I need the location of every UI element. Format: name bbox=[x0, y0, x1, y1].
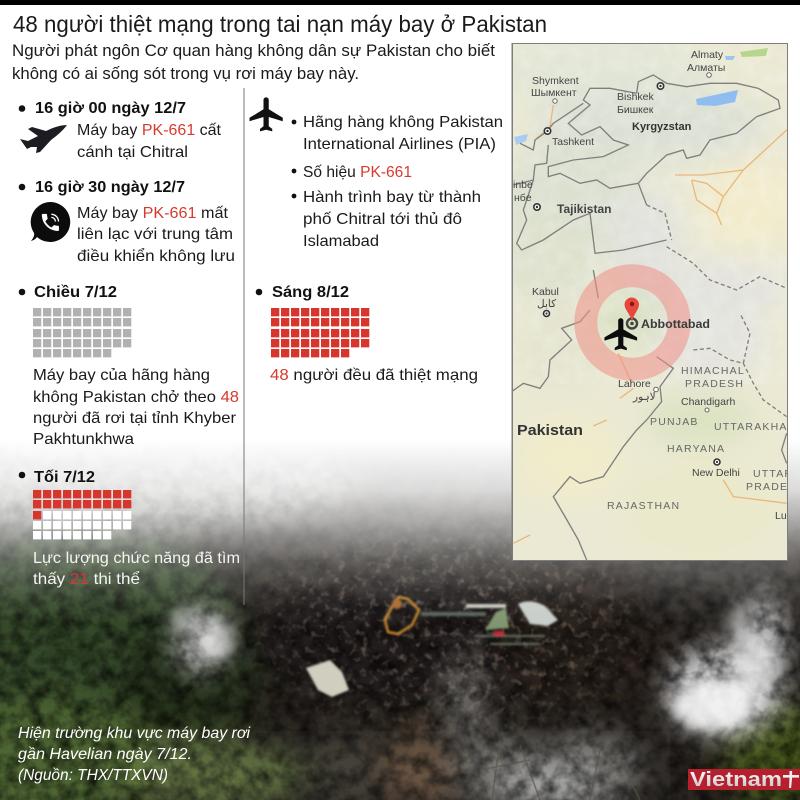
map labels: Tashkent bbox=[552, 136, 594, 148]
map labels: inbe bbox=[513, 179, 533, 191]
map labels: Kabul bbox=[532, 286, 559, 298]
flight info: Hãng hàng không Pakistan bbox=[303, 114, 503, 131]
event: Sáng 8/12: Sáng 8/12 bbox=[272, 284, 349, 301]
flight info: International Airlines (PIA) bbox=[303, 136, 496, 153]
event: Chiều 7/12: Chiều 7/12 bbox=[34, 284, 117, 301]
map labels: Tajikistan bbox=[557, 202, 611, 216]
map labels: Шымкент bbox=[531, 87, 577, 99]
map labels: Shymkent bbox=[532, 75, 579, 87]
helicopter bbox=[385, 597, 558, 645]
map labels: Алматы bbox=[687, 62, 725, 74]
map labels: New Delhi bbox=[692, 467, 740, 479]
map labels: Pakistan bbox=[517, 423, 583, 439]
map labels: لاہور bbox=[632, 391, 656, 403]
map labels: PRADESH bbox=[685, 378, 744, 390]
unit chart: 48 grey squares bbox=[33, 308, 131, 357]
location pin and Abbottabad label: Abbottabad bbox=[641, 317, 710, 331]
map labels: Chandigarh bbox=[681, 396, 735, 408]
icon: plane on map bbox=[604, 318, 637, 350]
crash debris bbox=[306, 660, 349, 697]
background photo: crash site on forested hillside bbox=[0, 430, 800, 800]
map roads bbox=[535, 105, 787, 225]
flight info: phố Chitral tới thủ đô bbox=[303, 211, 462, 228]
event: Sáng 8/12 bbox=[256, 284, 478, 384]
logo: Vietnam+ bbox=[688, 769, 800, 791]
map borders bbox=[513, 75, 787, 298]
event: 16 giờ 00: Máy bay PK-661 cất bbox=[77, 122, 222, 139]
event: Tối 7/12 bbox=[19, 469, 240, 588]
event: 16 giờ 00 bbox=[19, 100, 222, 161]
map labels: Бишкек bbox=[617, 104, 654, 116]
photo caption: Hiện trường khu vực máy bay rơi bbox=[18, 725, 250, 742]
map labels: Lu bbox=[775, 510, 787, 522]
event: Sáng 8/12: 48 người đều đã thiệt mạng bbox=[270, 367, 478, 384]
intro text bbox=[12, 41, 495, 83]
title: 48 người thiệt mạng trong tai nạn máy bay ở Pakistan bbox=[13, 11, 547, 37]
event: Chiều 7/12 bbox=[19, 284, 239, 448]
map labels: HARYANA bbox=[667, 443, 725, 455]
target ring bbox=[586, 276, 679, 369]
flight info: Hành trình bay từ thành bbox=[303, 189, 481, 206]
event: Tối 7/12: Lực lượng chức năng đã tìm bbox=[33, 550, 240, 567]
map panel bbox=[512, 43, 788, 561]
bottom translucent strip bbox=[302, 731, 668, 800]
event: Chiều 7/12: người đã rơi tại tỉnh Khyber bbox=[33, 410, 237, 427]
map labels: UTTAR bbox=[753, 468, 793, 480]
top black bar bbox=[0, 0, 800, 5]
event: Tối 7/12: thấy 21 thi thể bbox=[33, 570, 140, 588]
map water bbox=[696, 90, 738, 106]
logo: Vietnam+: Vietnam bbox=[690, 769, 782, 791]
event: Tối 7/12: Tối 7/12 bbox=[34, 469, 95, 486]
event: Chiều 7/12: Máy bay của hãng hàng bbox=[33, 367, 210, 384]
map labels bbox=[513, 49, 800, 522]
map labels: Lahore bbox=[618, 378, 651, 390]
unit chart: 21 of 48 red squares bbox=[33, 511, 131, 539]
photo caption bbox=[18, 725, 250, 784]
photo caption: (Nguồn: THX/TTXVN) bbox=[18, 767, 168, 784]
intro text: Người phát ngôn Cơ quan hàng không dân sự Pakistan cho biết bbox=[12, 41, 495, 60]
event: 16 giờ 00: cánh tại Chitral bbox=[77, 144, 188, 161]
map terrain bbox=[513, 54, 771, 478]
event: 16 giờ 30: Máy bay PK-661 mất bbox=[77, 205, 229, 222]
flight info bbox=[250, 97, 503, 250]
map labels: كابل bbox=[537, 298, 556, 310]
location pin and Abbottabad label bbox=[624, 298, 710, 331]
event: Chiều 7/12: không Pakistan chở theo 48 bbox=[33, 389, 239, 406]
map labels: HIMACHAL bbox=[681, 365, 745, 377]
photo caption: gần Havelian ngày 7/12. bbox=[18, 746, 192, 763]
event: 16 giờ 00: 16 giờ 00 ngày 12/7 bbox=[35, 100, 186, 117]
event: 16 giờ 30: liên lạc với trung tâm bbox=[77, 226, 233, 243]
foreground tree trunks bbox=[480, 740, 640, 800]
map labels: RAJASTHAN bbox=[607, 500, 680, 512]
map labels: PUNJAB bbox=[650, 416, 699, 428]
column divider bbox=[244, 88, 245, 605]
event: 16 giờ 30: 16 giờ 30 ngày 12/7 bbox=[35, 179, 185, 196]
flight info: Số hiệu PK-661 bbox=[303, 164, 412, 181]
intro text: không có ai sống sót trong vụ rơi máy bay này. bbox=[12, 64, 359, 83]
map labels: Almaty bbox=[691, 49, 724, 61]
map labels: нбе bbox=[514, 192, 532, 204]
event: 16 giờ 30 bbox=[19, 179, 235, 265]
unit chart: 48 red squares bbox=[271, 308, 369, 357]
event: 16 giờ 30: điều khiển không lưu bbox=[77, 247, 235, 265]
flight info: Islamabad bbox=[303, 233, 379, 250]
map labels: Bishkek bbox=[617, 91, 655, 103]
map labels: Kyrgyzstan bbox=[632, 121, 692, 133]
event: Chiều 7/12: Pakhtunkhwa bbox=[33, 431, 134, 448]
